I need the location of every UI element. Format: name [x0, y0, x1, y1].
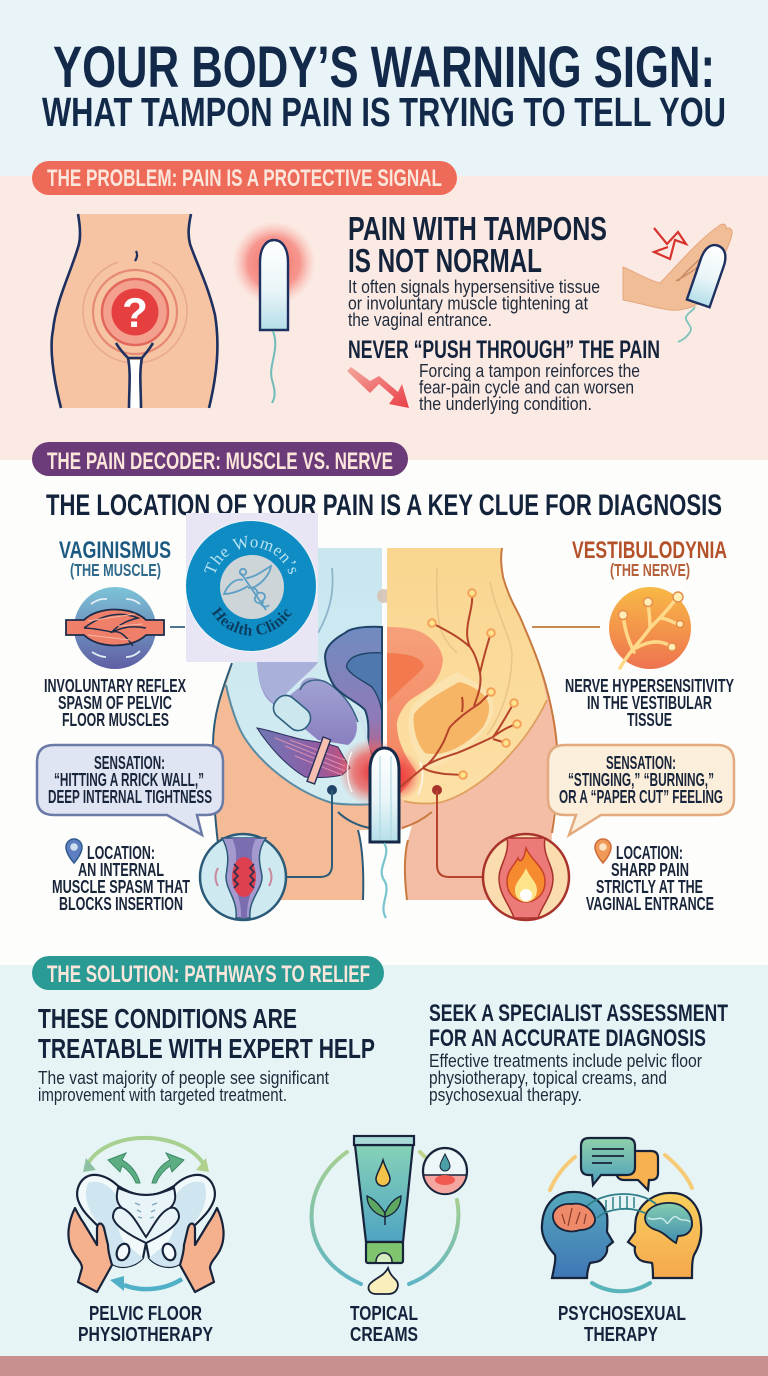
neural bridge — [585, 1194, 657, 1218]
section pill: pain decoder — [32, 442, 408, 476]
location: vaginal entrance: LOCATION: — [616, 843, 683, 863]
text block: improvement: improvement with targeted treatment. — [38, 1084, 287, 1105]
heading: vestibulodynia — [572, 537, 727, 580]
section pill: the problem — [32, 161, 457, 195]
text block: effective treatments: psychosexual therapy. — [429, 1084, 582, 1105]
heading: pain with tampons: PAIN WITH TAMPONS — [348, 210, 607, 247]
heading: specialist assessment — [429, 1000, 728, 1052]
heading: vaginismus: VAGINISMUS — [59, 537, 171, 564]
logo: The Women's Health Clinic: The Women’s — [204, 536, 296, 574]
location: internal muscle spasm: LOCATION: — [87, 843, 155, 863]
skin drop icon — [423, 1148, 467, 1194]
section pill: the problem: THE PROBLEM: PAIN IS A PROTECTIVE SIGNAL — [47, 165, 442, 192]
right column: vestibulodynia — [483, 537, 734, 920]
location: internal muscle spasm: MUSCLE SPASM THAT — [52, 877, 190, 897]
location: vaginal entrance: STRICTLY AT THE — [596, 877, 703, 897]
location: internal muscle spasm: BLOCKS INSERTION — [59, 894, 183, 914]
text block: improvement — [38, 1067, 329, 1105]
red pain glow — [338, 738, 406, 806]
label: topical creams: CREAMS — [350, 1324, 418, 1346]
location: internal muscle spasm: AN INTERNAL — [78, 860, 164, 880]
icon: muscle spasm circle — [200, 834, 286, 920]
label: topical creams: TOPICAL — [350, 1303, 418, 1325]
panel: the problem — [32, 161, 732, 414]
heading: treatable: THESE CONDITIONS ARE — [38, 1003, 297, 1034]
central tampon — [370, 748, 399, 918]
callout: muscle sensation: SENSATION: — [94, 753, 165, 773]
section pill: the solution — [32, 956, 384, 990]
text block: hypersensitive tissue: It often signals hypersensitive tissue — [348, 276, 600, 297]
icon: psychosexual therapy — [542, 1138, 701, 1291]
illustration: abdomen with question mark: ? — [122, 289, 148, 336]
circular arrows — [312, 1152, 458, 1284]
callout: muscle sensation — [37, 745, 223, 835]
cream dollop — [369, 1268, 398, 1294]
icon: irritated nerve — [532, 587, 691, 669]
decorative arcs — [550, 1155, 692, 1291]
heading: vaginismus: (THE MUSCLE) — [70, 560, 161, 580]
heading: treatable: TREATABLE WITH EXPERT HELP — [38, 1033, 375, 1064]
location: vaginal entrance: SHARP PAIN — [611, 860, 689, 880]
section pill: pain decoder: THE PAIN DECODER: MUSCLE VS. NERVE — [47, 448, 393, 475]
text block: effective treatments: physiotherapy, topical creams, and — [429, 1067, 667, 1088]
icon: downward red arrow — [347, 367, 409, 408]
text block: improvement: The vast majority of people see significant — [38, 1067, 329, 1088]
text block: hypersensitive tissue — [348, 276, 600, 330]
location: internal muscle spasm — [52, 839, 190, 914]
illustration: abdomen with question mark — [52, 214, 217, 408]
label: psychosexual therapy — [558, 1303, 686, 1346]
location: vaginal entrance: VAGINAL ENTRANCE — [586, 894, 714, 914]
text block: involuntary reflex: SPASM OF PELVIC — [58, 693, 172, 713]
left column: vaginismus — [37, 537, 286, 920]
text block: fear-pain cycle: Forcing a tampon reinforces the — [419, 360, 640, 381]
icon: flame circle — [483, 834, 569, 920]
blue head — [542, 1192, 613, 1278]
illustration: central pelvis cross-section — [213, 548, 557, 918]
callout: muscle sensation: DEEP INTERNAL TIGHTNESS — [48, 787, 212, 807]
icon: pelvic floor physiotherapy — [68, 1138, 224, 1292]
label: psychosexual therapy: THERAPY — [584, 1324, 659, 1346]
panel: the solution — [32, 956, 728, 1346]
icon: topical creams — [312, 1136, 467, 1294]
heading: pain with tampons: IS NOT NORMAL — [348, 242, 542, 279]
heading: vestibulodynia: (THE NERVE) — [610, 560, 690, 580]
text block: involuntary reflex: FLOOR MUSCLES — [62, 710, 169, 730]
label: pelvic floor physiotherapy: PHYSIOTHERAPY — [78, 1324, 214, 1346]
left half: muscle — [213, 548, 391, 900]
icon: hand refusing tampon — [623, 224, 732, 342]
heading: treatable — [38, 1003, 375, 1064]
text block: fear-pain cycle: fear-pain cycle and can worsen — [419, 376, 634, 398]
callout: muscle sensation: “HITTING A RRICK WALL,” — [54, 770, 204, 790]
panel: the pain decoder — [32, 442, 736, 922]
text block: hypersensitive tissue: the vaginal entrance. — [348, 309, 492, 330]
callout: nerve sensation: SENSATION: — [606, 753, 676, 773]
logo: The Women's Health Clinic: Health Clinic — [211, 606, 292, 636]
heading: pain with tampons — [348, 210, 607, 279]
location: vaginal entrance — [586, 839, 714, 914]
brain left — [553, 1204, 595, 1231]
logo: The Women's Health Clinic — [185, 513, 318, 662]
text block: fear-pain cycle — [419, 360, 640, 414]
text block: nerve hypersensitivity: TISSUE — [627, 710, 672, 730]
caduceus emblem — [224, 566, 271, 610]
heading: vaginismus — [59, 537, 171, 580]
label: pelvic floor physiotherapy — [78, 1303, 214, 1346]
text block: hypersensitive tissue: or involuntary muscle tightening at — [348, 292, 588, 314]
right half: nerve — [387, 548, 557, 900]
title — [42, 35, 726, 135]
cream tube — [354, 1136, 414, 1263]
label: pelvic floor physiotherapy: PELVIC FLOOR — [89, 1303, 202, 1325]
text block: nerve hypersensitivity — [565, 676, 734, 730]
brain right — [645, 1203, 692, 1243]
text block: involuntary reflex — [44, 676, 186, 730]
text block: effective treatments — [429, 1050, 702, 1105]
section pill: the solution: THE SOLUTION: PATHWAYS TO RELIEF — [47, 961, 370, 988]
text block: fear-pain cycle: the underlying condition. — [419, 393, 592, 414]
icon: glowing tampon — [232, 221, 316, 403]
icon: tense muscle — [66, 587, 185, 669]
hands — [68, 1208, 224, 1292]
label: psychosexual therapy: PSYCHOSEXUAL — [558, 1303, 686, 1325]
pointer dots and leader lines — [287, 785, 484, 877]
callout: nerve sensation — [548, 745, 734, 835]
footer band — [0, 1356, 768, 1376]
nerve branches — [400, 589, 521, 787]
pelvis bones — [77, 1175, 215, 1267]
arrows around pelvis — [83, 1138, 209, 1291]
label: topical creams — [350, 1303, 418, 1346]
yellow head — [628, 1193, 701, 1278]
speech bubbles — [581, 1138, 658, 1190]
text block: nerve hypersensitivity: IN THE VESTIBULAR — [587, 693, 712, 713]
text block: effective treatments: Effective treatments include pelvic floor — [429, 1050, 702, 1071]
text block: involuntary reflex: INVOLUNTARY REFLEX — [44, 676, 186, 696]
